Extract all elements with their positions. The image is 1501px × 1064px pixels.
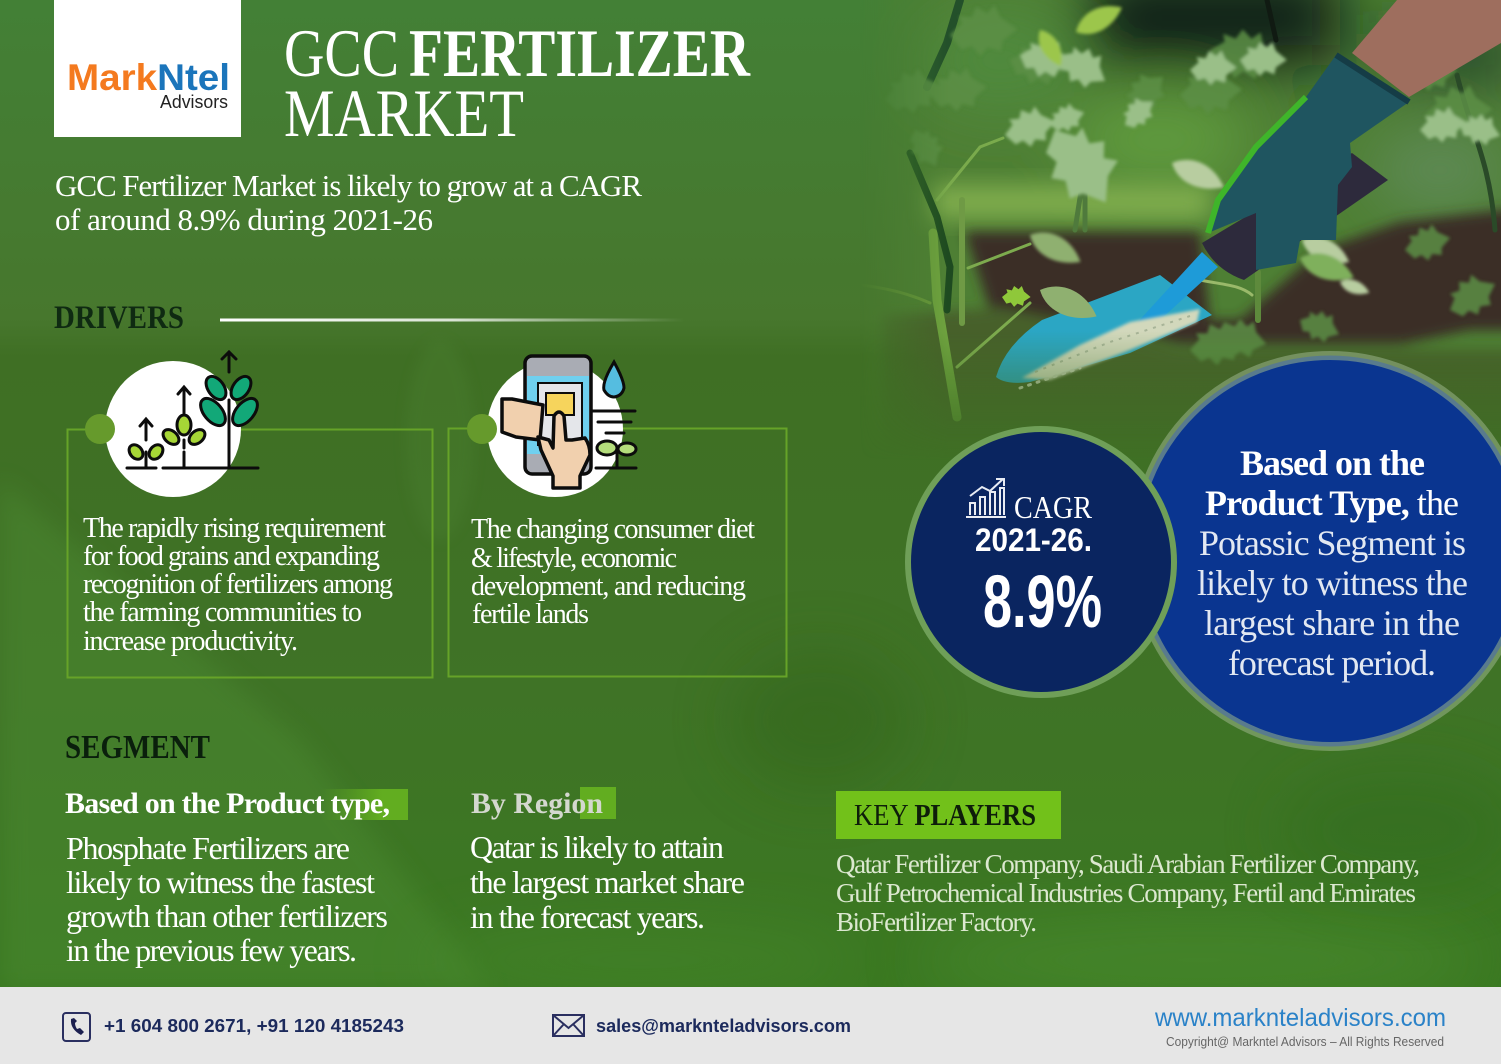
subtitle	[55, 168, 642, 237]
text: driver 1: the farming communities to	[83, 597, 362, 628]
arm	[1352, 0, 1501, 97]
panel: driver 2	[448, 356, 786, 676]
segment: by region: the largest market share	[470, 864, 745, 900]
callout: product type circle: largest share in the	[1204, 603, 1460, 643]
leaves over trowel	[1002, 286, 1096, 318]
callout: product type circle: likely to witness the	[1197, 563, 1468, 603]
key players: BioFertilizer Factory.	[836, 907, 1037, 937]
logo: MarkNtel	[67, 57, 230, 98]
footer	[0, 987, 1501, 1064]
segment: product type: growth than other fertilizers	[66, 898, 388, 934]
callout: product type circle: Based on the	[1240, 443, 1425, 483]
icon: growing plants	[85, 352, 262, 497]
footer: www.marknteladvisors.com	[1154, 1004, 1446, 1032]
segment: product type: likely to witness the fastest	[66, 864, 375, 900]
title	[284, 15, 751, 151]
icon: growth chart	[966, 479, 1006, 517]
title: GCC	[284, 15, 399, 91]
footer: sales@marknteladvisors.com	[596, 1016, 851, 1036]
callout: CAGR circle: CAGR	[1014, 489, 1093, 525]
panel: driver 1	[68, 352, 432, 678]
segment: by region: in the forecast years.	[470, 899, 705, 935]
text: driver 1: increase productivity.	[83, 626, 298, 657]
photo: gloved hand with trowel spreading fertilizer	[882, 0, 1501, 422]
title: FERTILIZER	[409, 15, 751, 91]
callout: product type circle: Product Type, the	[1205, 483, 1459, 523]
callout: product type circle	[1134, 356, 1501, 746]
segment: product type	[65, 787, 408, 968]
callout: CAGR circle: 2021-26.	[975, 522, 1092, 558]
segment: by region: Qatar is likely to attain	[470, 829, 724, 865]
subtitle: GCC Fertilizer Market is likely to grow at a CAGR	[55, 168, 642, 203]
segment: product type: Based on the Product type,	[65, 787, 390, 820]
logo: Advisors	[160, 92, 228, 112]
footer: +1 604 800 2671, +91 120 4185243	[104, 1016, 404, 1036]
key players	[836, 791, 1420, 937]
text: driver 2: The changing consumer diet	[471, 514, 755, 545]
callout: product type circle: forecast period.	[1228, 643, 1436, 683]
text: driver 2	[471, 514, 755, 630]
segment: by region: By Region	[471, 787, 603, 820]
glove	[1208, 55, 1409, 270]
segment: product type: Phosphate Fertilizers are	[66, 830, 350, 866]
trowel scoop	[996, 275, 1212, 383]
callout: CAGR circle	[908, 429, 1174, 695]
segment: product type: in the previous few years.	[66, 932, 357, 968]
fertilizer pellets	[1020, 309, 1200, 388]
heading: drivers: DRIVERS	[54, 300, 184, 336]
icon: mail	[553, 1015, 584, 1036]
logo	[54, 0, 241, 137]
icon: phone, hand and plant	[467, 356, 636, 497]
icon: phone	[63, 1013, 90, 1041]
text: driver 2: & lifestyle, economic	[471, 543, 677, 574]
text: driver 1: for food grains and expanding	[83, 541, 380, 572]
text: driver 1: recognition of fertilizers among	[83, 569, 393, 600]
title: MARKET	[284, 75, 524, 151]
text: driver 1	[83, 513, 393, 657]
trowel handle	[1202, 153, 1388, 280]
key players: KEY PLAYERS	[854, 797, 1036, 832]
key players: Gulf Petrochemical Industries Company, Fertil and Emirates	[836, 878, 1416, 908]
key players: Qatar Fertilizer Company, Saudi Arabian Fertilizer Company,	[836, 849, 1420, 879]
text: driver 2: fertile lands	[472, 599, 589, 630]
foliage	[879, 0, 1501, 369]
footer: Copyright@ Markntel Advisors – All Rights Reserved	[1166, 1035, 1444, 1049]
heading: segment: SEGMENT	[65, 729, 210, 766]
text: driver 2: development, and reducing	[471, 571, 746, 602]
callout: product type circle: Potassic Segment is	[1199, 523, 1466, 563]
text: driver 1: The rapidly rising requirement	[83, 513, 386, 544]
trowel neck	[1140, 252, 1218, 320]
callout: CAGR circle: 8.9%	[983, 560, 1102, 643]
subtitle: of around 8.9% during 2021-26	[55, 202, 433, 237]
plant stems	[833, 0, 1495, 417]
segment: by region	[470, 787, 745, 935]
